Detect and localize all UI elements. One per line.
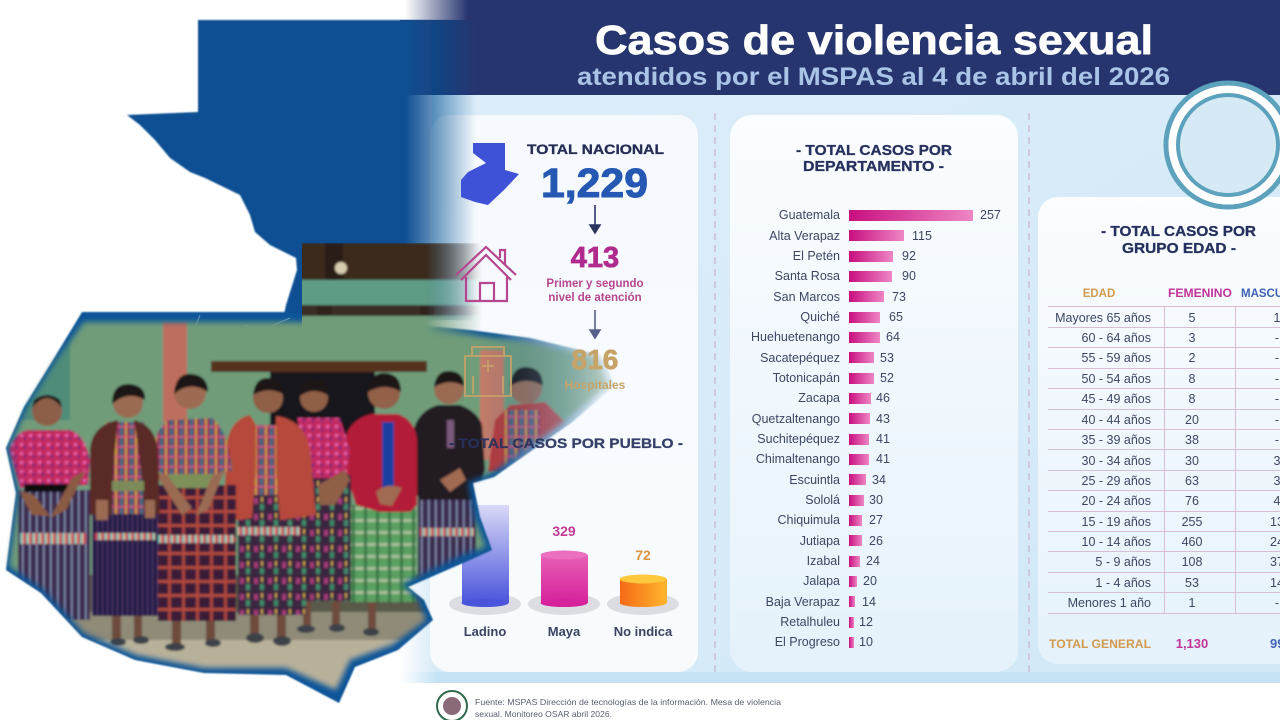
label Ladino: Ladino [464, 624, 506, 639]
source note: sexual. Monitoreo OSAR abril 2026. [475, 709, 612, 719]
female values: 3 [1189, 331, 1196, 345]
female values: 76 [1185, 494, 1199, 508]
value 413: 413 [571, 242, 619, 274]
header top fade [400, 0, 472, 20]
total nacional label: TOTAL NACIONAL [527, 141, 664, 157]
male values: - [1275, 596, 1279, 610]
icon: magnifying glass [1166, 83, 1280, 207]
lintel and door [210, 360, 428, 437]
age labels: 30 - 34 años [1082, 454, 1151, 468]
table headers [1083, 288, 1280, 300]
female values: 8 [1189, 372, 1196, 386]
woman 2 [90, 384, 160, 616]
department names: Totonicapán [773, 371, 840, 385]
chart bar: Ladino base [449, 593, 521, 615]
department names: Sololá [805, 493, 840, 507]
department values: 65 [889, 310, 903, 324]
lower-left fade of background [400, 540, 436, 683]
table grid [1048, 306, 1280, 614]
first and second level label [546, 278, 644, 304]
department values: 115 [912, 229, 932, 243]
shoes [110, 624, 379, 651]
dashed divider left [714, 113, 716, 672]
age labels: 35 - 39 años [1082, 433, 1151, 447]
subtitle: atendidos por el MSPAS al 4 de abril del 2026 [577, 63, 1170, 91]
department names: Quiché [800, 310, 840, 324]
department names: Jutiapa [800, 534, 840, 548]
map of Guatemala, top section [127, 20, 480, 320]
icon: hospital [465, 347, 511, 396]
table headers: EDAD [1083, 288, 1115, 300]
department values: 257 [980, 208, 1001, 222]
department values: 64 [886, 330, 900, 344]
heading: age group [1101, 224, 1257, 257]
wall teal corner [20, 340, 70, 420]
department values: 92 [902, 249, 916, 263]
age labels: 45 - 49 años [1082, 392, 1151, 406]
department values: 26 [869, 534, 883, 548]
female values: 5 [1189, 311, 1196, 325]
source note [475, 697, 781, 719]
department names: Sacatepéquez [760, 351, 840, 365]
department names [751, 208, 840, 649]
icon: house [456, 247, 516, 301]
male values: - [1275, 413, 1279, 427]
base Maya [528, 593, 600, 615]
department names: Jalapa [803, 574, 840, 588]
heading: age group: GRUPO EDAD - [1122, 241, 1236, 257]
arrow down 1 [590, 205, 600, 233]
panel: age group [1038, 197, 1280, 664]
table: cases by age group [1048, 288, 1280, 651]
panel: department [730, 115, 1018, 672]
department values: 53 [880, 351, 894, 365]
value No indica: 72 [635, 547, 651, 563]
department values: 24 [866, 554, 880, 568]
department names: Santa Rosa [775, 269, 840, 283]
department names: Chimaltenango [756, 452, 840, 466]
age labels: 55 - 59 años [1082, 351, 1151, 365]
department values: 73 [892, 290, 906, 304]
woman 3 [150, 374, 236, 621]
map of Guatemala, bottom section [6, 312, 615, 703]
department names: Retalhuleu [780, 615, 840, 629]
base No indica [607, 593, 679, 615]
department values: 52 [880, 371, 894, 385]
heading: department [796, 143, 953, 175]
icon: Guatemala map [461, 143, 519, 205]
department values: 43 [876, 412, 890, 426]
total nacional value: 1,229 [541, 160, 648, 206]
male values: - [1275, 331, 1279, 345]
total general row: TOTAL GENERAL [1049, 637, 1151, 651]
table headers: FEMENINO [1168, 288, 1232, 300]
first and second level label: Primer y segundo [546, 278, 644, 290]
department names: Suchitepéquez [757, 432, 840, 446]
department names: El Petén [793, 249, 840, 263]
steps [96, 639, 402, 693]
female values: 8 [1189, 392, 1196, 406]
pillar left [163, 322, 187, 422]
department names: San Marcos [773, 290, 840, 304]
value 816: 816 [572, 344, 618, 375]
hospitales label: Hospitales [565, 378, 626, 392]
female values: 460 [1182, 535, 1202, 549]
woman 6 [343, 373, 417, 602]
heading: age group: - TOTAL CASOS POR [1101, 224, 1257, 240]
age labels: 40 - 44 años [1082, 413, 1151, 427]
heading: pueblo: - TOTAL CASOS POR PUEBLO - [449, 435, 683, 451]
first and second level label: nivel de atención [548, 292, 642, 304]
roof [302, 243, 480, 318]
department values: 14 [862, 595, 876, 609]
age labels: 20 - 24 años [1082, 494, 1151, 508]
female values: 108 [1182, 555, 1202, 569]
department values: 10 [859, 635, 873, 649]
legs [112, 598, 376, 646]
pillar right [480, 350, 504, 460]
department values: 20 [863, 574, 877, 588]
department values: 30 [869, 493, 883, 507]
value Maya: 329 [552, 523, 576, 539]
header band [400, 0, 1280, 95]
male values: - [1275, 351, 1279, 365]
age labels: 5 - 9 años [1095, 555, 1151, 569]
bars [849, 210, 973, 648]
cylinder No indica [620, 574, 667, 607]
department names: Alta Verapaz [769, 229, 840, 243]
department names: Quetzaltenango [752, 412, 840, 426]
age labels: 1 - 4 años [1095, 576, 1151, 590]
heading: department: - TOTAL CASOS POR [796, 143, 953, 159]
department names: Chiquimula [777, 513, 840, 527]
male values: - [1275, 372, 1279, 386]
chart: cases by people [464, 523, 679, 639]
floor [68, 611, 429, 642]
photo: women in traditional dress [0, 243, 640, 710]
arrow down 2 [590, 310, 600, 338]
department names: Escuintla [789, 473, 840, 487]
female values: 53 [1185, 576, 1199, 590]
woman 7 [412, 371, 485, 575]
department values [859, 208, 1001, 649]
woman 5 [297, 379, 351, 601]
age labels: Menores 1 año [1068, 596, 1151, 610]
age labels: 60 - 64 años [1082, 331, 1151, 345]
female values: 63 [1185, 474, 1199, 488]
map cracks [186, 315, 290, 350]
woman 4 [224, 378, 316, 615]
department names: Baja Verapaz [766, 595, 840, 609]
department names: Huehuetenango [751, 330, 840, 344]
infographic background [400, 95, 1280, 683]
female values: 38 [1185, 433, 1199, 447]
bottom strip [400, 672, 1280, 683]
source note: Fuente: MSPAS Dirección de tecnologías de la información. Mesa de violencia [475, 697, 781, 707]
age labels: 25 - 29 años [1082, 474, 1151, 488]
title: Casos de violencia sexual [595, 17, 1153, 63]
female values: 20 [1185, 413, 1199, 427]
male values [1270, 311, 1280, 610]
department values: 12 [859, 615, 873, 629]
panel: national total [430, 115, 698, 672]
left card lower extension [400, 683, 682, 720]
age labels: 15 - 19 años [1082, 515, 1151, 529]
icon: OSAR logo [437, 691, 467, 720]
cylinder Maya [540, 550, 588, 607]
label No indica: No indica [614, 624, 673, 639]
total general row: 1,130 [1176, 636, 1208, 651]
woman 1 [8, 395, 90, 620]
department names: El Progreso [775, 635, 840, 649]
green wall [0, 316, 640, 576]
age labels: Mayores 65 años [1055, 311, 1151, 325]
heading: department: DEPARTAMENTO - [803, 159, 944, 175]
department values: 34 [872, 473, 886, 487]
male values: - [1275, 392, 1279, 406]
department values: 27 [869, 513, 883, 527]
department values: 90 [902, 269, 916, 283]
dashed divider right [1028, 113, 1030, 672]
department values: 46 [876, 391, 890, 405]
age labels [1055, 311, 1151, 610]
age labels: 50 - 54 años [1082, 372, 1151, 386]
department values: 41 [876, 432, 890, 446]
chart: cases by department [751, 208, 1001, 649]
female values: 30 [1185, 454, 1199, 468]
department names: Zacapa [798, 391, 840, 405]
age labels: 10 - 14 años [1082, 535, 1151, 549]
porch floor [88, 574, 426, 614]
female values: 2 [1189, 351, 1196, 365]
female values: 1 [1189, 596, 1196, 610]
chart bar: Ladino cylinder [462, 505, 509, 607]
label Maya: Maya [548, 624, 581, 639]
department names: Guatemala [779, 208, 840, 222]
female values [1182, 311, 1202, 610]
female values: 255 [1182, 515, 1202, 529]
woman 8 [488, 367, 570, 472]
total general row [1049, 636, 1280, 651]
department names: Izabal [807, 554, 840, 568]
department values: 41 [876, 452, 890, 466]
male values: - [1275, 433, 1279, 447]
